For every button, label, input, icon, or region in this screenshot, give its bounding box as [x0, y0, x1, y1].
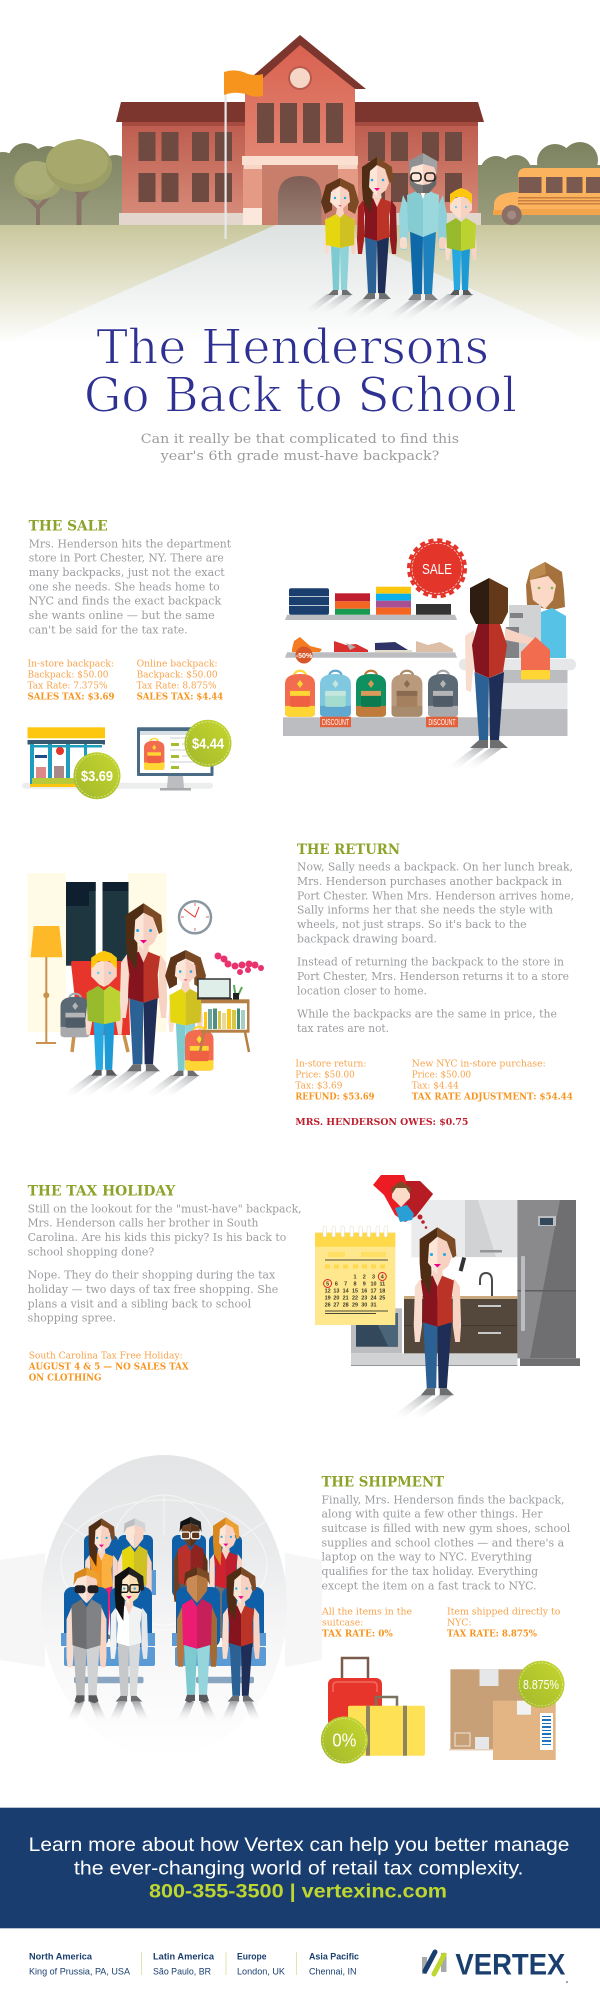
footer	[29, 1948, 568, 1983]
office: Asia Pacific: Chennai, IN	[309, 1966, 357, 1977]
kitchen illustration	[315, 1175, 580, 1418]
heading: THE SALE	[29, 518, 108, 534]
shoes	[292, 637, 453, 652]
office: North America: North America	[29, 1951, 93, 1962]
body text: can't be said for the tax rate.	[29, 623, 188, 636]
airplane illustration	[0, 1455, 322, 1757]
tax holiday dates: AUGUST 4 & 5 — NO SALES TAX	[28, 1362, 189, 1372]
banner text: the ever-changing world of retail tax complexity.	[74, 1858, 524, 1879]
body text: NYC and finds the exact backpack	[29, 595, 222, 608]
shipped item tax rate	[447, 1607, 561, 1640]
calendar: 1	[354, 1274, 356, 1280]
in-store return calculation	[295, 1059, 374, 1103]
online calculation: Online backpack:	[137, 659, 218, 670]
sale burst: SALE	[422, 561, 452, 578]
family: Mr. Henderson	[383, 153, 447, 320]
office: Europe: London, UK	[237, 1966, 286, 1977]
icon: yellow suitcase	[348, 1697, 425, 1756]
calendar: 14	[343, 1288, 349, 1294]
calendar: 29	[352, 1302, 358, 1308]
body text: location closer to home.	[297, 984, 427, 997]
tax holiday dates: ON CLOTHING	[29, 1373, 101, 1383]
office: Latin America: Latin America	[153, 1951, 215, 1962]
fuselage	[41, 1455, 287, 1757]
family: Sally	[300, 178, 359, 314]
in-store calculation	[28, 659, 114, 703]
new purchase calculation	[412, 1059, 573, 1103]
front row seats	[61, 1587, 266, 1683]
laptop	[197, 979, 232, 1000]
body text	[28, 1202, 302, 1325]
badge: 0%	[321, 1716, 368, 1764]
online calculation	[137, 659, 223, 703]
body text: Still on the lookout for the "must-have" backpack,	[28, 1202, 302, 1215]
online calculation: Tax Rate: 8.875%	[137, 681, 217, 692]
title: The Hendersons	[96, 319, 489, 375]
suitcase tax rate: TAX RATE: 0%	[322, 1630, 393, 1640]
body text: Port Chester, Mrs. Henderson returns it to a store	[297, 970, 569, 983]
body text: holiday — two days of tax free shopping. She	[28, 1283, 278, 1296]
passenger: woman in white	[110, 1567, 148, 1702]
body text: laptop on the way to NYC. Everything	[322, 1551, 532, 1564]
calendar: 11	[379, 1282, 385, 1288]
body text: school shopping done?	[28, 1245, 154, 1258]
amount owed: MRS. HENDERSON OWES: $0.75	[295, 1117, 468, 1128]
body text: one she needs. She heads home to	[29, 580, 220, 593]
body text: Nope. They do their shopping during the tax	[28, 1269, 276, 1282]
calendar: 13	[333, 1288, 339, 1294]
suitcase tax rate: All the items in the	[321, 1607, 412, 1618]
new purchase calculation: New NYC in-store purchase:	[412, 1059, 546, 1070]
display counter	[283, 717, 568, 736]
section: the sale text	[28, 518, 232, 703]
orchid plant	[214, 952, 264, 1000]
wings	[0, 1553, 322, 1667]
body text	[322, 1493, 571, 1592]
calendar: 20	[333, 1296, 339, 1302]
calendar: 18	[379, 1288, 385, 1294]
discount tags	[320, 717, 458, 727]
shipped item tax rate: Item shipped directly to	[447, 1607, 561, 1618]
subtitle	[141, 432, 459, 464]
office: Asia Pacific: Asia Pacific	[309, 1951, 359, 1962]
badge: $4.44: $4.44	[192, 736, 224, 752]
foot shadows	[66, 1702, 262, 1723]
South Carolina map with brother	[373, 1175, 433, 1229]
section: the tax holiday text	[28, 1184, 302, 1383]
icon: red suitcase	[328, 1658, 382, 1727]
new purchase calculation: Tax: $4.44	[412, 1081, 459, 1092]
boy	[60, 951, 123, 1097]
suitcase tax rate	[321, 1607, 412, 1640]
body text: Port Chester. When Mrs. Henderson arrives home,	[297, 889, 574, 902]
Mrs. Henderson	[96, 903, 167, 1094]
subtitle: Can it really be that complicated to find this	[141, 432, 459, 447]
banner text: Learn more about how Vertex can help you better manage	[29, 1835, 569, 1856]
tax holiday dates: South Carolina Tax Free Holiday:	[29, 1350, 183, 1361]
banner text	[29, 1835, 569, 1879]
calendar: 28	[343, 1302, 349, 1308]
office: North America: King of Prussia, PA, USA	[29, 1966, 131, 1977]
icon: storefront	[22, 727, 213, 789]
new purchase calculation: TAX RATE ADJUSTMENT: $54.44	[412, 1093, 573, 1103]
small tree	[14, 161, 62, 225]
office: North America	[29, 1951, 131, 1977]
calendar: 2	[363, 1274, 366, 1280]
store illustration	[283, 541, 576, 769]
office: Europe	[237, 1951, 286, 1977]
heading: THE RETURN	[297, 842, 400, 858]
in-store calculation: SALES TAX: $3.69	[28, 693, 114, 703]
passenger: blonde woman	[209, 1517, 243, 1638]
shelves	[285, 615, 457, 658]
calendar: 3	[372, 1274, 375, 1280]
calendar: 27	[333, 1302, 339, 1308]
family: boy	[421, 188, 477, 314]
calendar: 6	[335, 1282, 338, 1288]
tree line background	[0, 142, 600, 225]
body text: suitcase is filled with new gym shoes, school	[322, 1522, 571, 1535]
floor lamp	[31, 926, 62, 1044]
passenger: older man in yellow	[118, 1518, 152, 1634]
discount tags: DISCOUNT	[428, 717, 456, 727]
in-store return calculation: Price: $50.00	[295, 1070, 355, 1081]
new purchase calculation: Price: $50.00	[412, 1070, 471, 1081]
sale burst	[410, 541, 464, 596]
passenger: Mrs. Henderson	[222, 1567, 260, 1702]
body text: shopping spree.	[28, 1312, 116, 1325]
title: Go Back to School	[84, 368, 517, 424]
orange backpack held up	[521, 637, 550, 680]
subtitle: year's 6th grade must-have backpack?	[160, 449, 439, 464]
body text: store in Port Chester, NY. There are	[29, 552, 224, 565]
living room illustration	[28, 873, 264, 1097]
calendar: 23	[361, 1296, 367, 1302]
school wings	[116, 102, 484, 225]
body text: While the backpacks are the same in price, the	[297, 1008, 557, 1021]
back row seats	[84, 1535, 242, 1597]
calendar: 16	[361, 1288, 367, 1294]
badge: 0%: 0%	[332, 1730, 356, 1750]
school central block	[242, 35, 366, 225]
calendar: 30	[361, 1302, 367, 1308]
family: Mrs. Henderson	[337, 157, 397, 318]
body text	[29, 537, 232, 636]
discount badge: -50%: -50%	[296, 653, 313, 660]
cashier	[526, 562, 566, 658]
calendar: 15	[352, 1288, 358, 1294]
body text: backpack drawing board.	[297, 932, 437, 945]
refrigerator	[517, 1200, 580, 1366]
office: Latin America: São Paulo, BR	[153, 1966, 211, 1977]
suitcase tax rate: suitcase:	[322, 1618, 363, 1629]
body text: she wants online — but the same	[29, 609, 215, 622]
ground and road	[0, 225, 600, 345]
calendar	[315, 1226, 395, 1325]
in-store return calculation: Tax: $3.69	[295, 1081, 342, 1092]
upper cabinets	[411, 1200, 518, 1257]
body text: qualifies for the tax holiday. Everything	[322, 1565, 538, 1578]
call to action banner	[0, 1808, 600, 1928]
badge: 8.875%	[518, 1661, 564, 1708]
heading: THE SHIPMENT	[322, 1475, 444, 1491]
badge: 8.875%: 8.875%	[523, 1678, 559, 1692]
gray backpack	[60, 994, 90, 1037]
body text: Mrs. Henderson hits the department	[29, 537, 232, 550]
section: the return text	[295, 842, 574, 1128]
icon: shipping boxes	[449, 1669, 556, 1760]
badge: $4.44	[184, 720, 232, 767]
online calculation: SALES TAX: $4.44	[137, 693, 223, 703]
body text: wheels, not just straps. So it's back to the	[297, 918, 527, 931]
faucet	[480, 1273, 492, 1296]
heading: THE TAX HOLIDAY	[28, 1184, 176, 1200]
office: Europe: Europe	[237, 1951, 266, 1962]
passenger: man with white glasses	[174, 1517, 208, 1632]
lower cabinets and counter	[404, 1296, 517, 1354]
calendar: 21	[343, 1296, 349, 1302]
wall clock	[179, 901, 211, 933]
section: the shipment text	[321, 1475, 571, 1640]
customer seen from behind	[445, 578, 538, 769]
calendar: 24	[370, 1296, 376, 1302]
body text: supplies and school clothes — and there's a	[322, 1536, 565, 1549]
title	[84, 319, 517, 424]
body text: Finally, Mrs. Henderson finds the backpack,	[322, 1493, 564, 1506]
body text: many backpacks, just not the exact	[29, 566, 225, 579]
calendar: 26	[325, 1302, 331, 1308]
contact details: 800-355-3500 | vertexinc.com	[149, 1880, 447, 1902]
large tree	[46, 139, 112, 225]
in-store calculation: Tax Rate: 7.375%	[28, 681, 108, 692]
side table with books	[200, 999, 250, 1052]
curtains	[28, 873, 166, 1032]
badge: $3.69: $3.69	[81, 769, 113, 785]
oven	[351, 1308, 402, 1353]
body text: Carolina. Are his kids this picky? Is his back to	[28, 1231, 287, 1244]
orange backpack	[185, 1027, 214, 1071]
passenger: man in pink	[177, 1567, 217, 1703]
calendar: 31	[370, 1302, 376, 1308]
calendar: 4	[381, 1274, 384, 1280]
passenger: man with sunglasses	[66, 1567, 106, 1703]
body text: along with quite a few other things. Her	[322, 1508, 543, 1521]
calendar: 17	[370, 1288, 376, 1294]
calendar: 25	[379, 1296, 385, 1302]
hero illustration: school and family	[0, 35, 600, 345]
flag and pole	[224, 70, 263, 239]
body text: Now, Sally needs a backpack. On her lunch break,	[297, 861, 573, 874]
body text: tax rates are not.	[297, 1022, 389, 1035]
calendar: 12	[325, 1288, 331, 1294]
office: Asia Pacific	[309, 1951, 359, 1977]
body text: Mrs. Henderson calls her brother in South	[28, 1217, 258, 1230]
body text: Mrs. Henderson purchases another backpack in	[297, 875, 562, 888]
office: Latin America	[153, 1951, 215, 1977]
discount tags: DISCOUNT	[322, 717, 349, 727]
calendar: 19	[325, 1296, 331, 1302]
discount badge: -50%	[296, 646, 313, 664]
school bus	[493, 168, 600, 225]
body text: Sally informs her that she needs the style with	[297, 904, 553, 917]
icon: computer showing online store	[137, 727, 214, 790]
tax holiday dates	[28, 1350, 189, 1383]
Mrs. Henderson on phone	[389, 1227, 466, 1418]
backpack row	[285, 671, 458, 717]
body text: except the item on a fast track to NYC.	[322, 1579, 536, 1592]
shipped item tax rate: NYC:	[447, 1618, 472, 1629]
calendar: 9	[363, 1282, 366, 1288]
armchair	[71, 961, 130, 1052]
body text	[297, 861, 574, 1035]
shipped item tax rate: TAX RATE: 8.875%	[447, 1630, 537, 1640]
calendar: 7	[344, 1282, 347, 1288]
badge: $3.69	[74, 752, 120, 799]
calendar: 22	[352, 1296, 358, 1302]
passenger: woman in orange	[84, 1518, 118, 1639]
body text: Instead of returning the backpack to the store in	[297, 956, 564, 969]
body text: plans a visit and a sibling back to school	[28, 1297, 252, 1310]
in-store calculation: In-store backpack:	[28, 659, 114, 670]
in-store return calculation: In-store return:	[295, 1059, 366, 1070]
Sally	[142, 950, 206, 1097]
Vertex logo: VERTEX	[455, 1948, 565, 1981]
folded clothes	[289, 587, 451, 615]
calendar: 5	[326, 1282, 329, 1288]
floor strip	[351, 1353, 517, 1366]
sales counter	[459, 659, 576, 736]
window	[66, 882, 128, 966]
cash register	[504, 605, 541, 658]
calendar: 10	[370, 1282, 376, 1288]
in-store return calculation: REFUND: $53.69	[295, 1093, 374, 1103]
calendar: 8	[354, 1282, 356, 1288]
in-store calculation: Backpack: $50.00	[28, 670, 109, 681]
online calculation: Backpack: $50.00	[137, 670, 218, 681]
